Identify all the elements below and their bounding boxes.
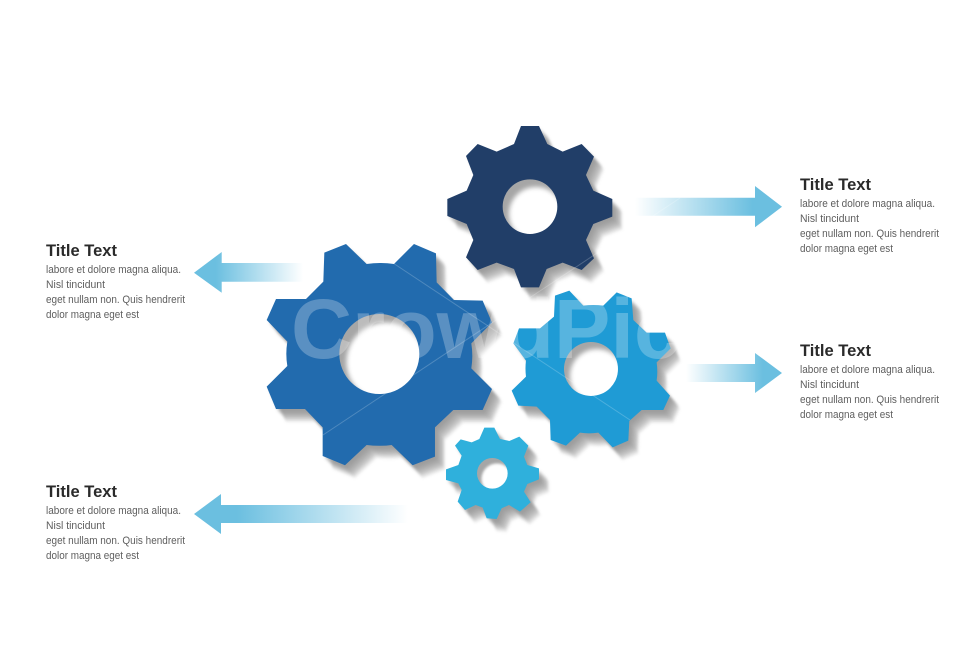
text block: lower left: labore et dolore magna aliqua. [46, 505, 181, 517]
text block: top right: Title Text [800, 175, 871, 194]
text block: lower left: dolor magna eget est [46, 550, 139, 562]
text block: lower left: eget nullam non. Quis hendrerit [46, 535, 185, 547]
text block: upper left: Nisl tincidunt [46, 279, 105, 291]
text block: middle right: dolor magna eget est [800, 409, 893, 421]
gear: dark navy [447, 126, 622, 300]
text block: upper left: eget nullam non. Quis hendrerit [46, 294, 185, 306]
text block: middle right [800, 341, 939, 421]
gear: large blue [267, 244, 502, 478]
text block: upper left: labore et dolore magna aliqua. [46, 264, 181, 276]
watermark [291, 198, 681, 435]
text block: upper left: dolor magna eget est [46, 309, 139, 321]
text block: upper left: Title Text [46, 241, 117, 260]
text block: lower left: Nisl tincidunt [46, 520, 105, 532]
text block: top right: labore et dolore magna aliqua. [800, 198, 935, 210]
text block: middle right: Nisl tincidunt [800, 379, 859, 391]
text block: middle right: labore et dolore magna aliqua. [800, 364, 935, 376]
arrow: middle right [686, 353, 782, 393]
text block: top right: dolor magna eget est [800, 243, 893, 255]
text block: top right: eget nullam non. Quis hendrerit [800, 228, 939, 240]
arrow: top right [635, 186, 782, 227]
gear: medium sky blue [512, 291, 681, 460]
arrow: upper left [194, 252, 303, 293]
gear: small cyan [446, 428, 549, 532]
text block: top right: Nisl tincidunt [800, 213, 859, 225]
text block: lower left [46, 482, 185, 562]
text block: upper left [46, 241, 185, 321]
watermark: CrowdPic [291, 282, 681, 376]
text block: top right [800, 175, 939, 255]
text block: middle right: eget nullam non. Quis hendrerit [800, 394, 939, 406]
text block: lower left: Title Text [46, 482, 117, 501]
arrow: lower left [194, 494, 408, 534]
text block: middle right: Title Text [800, 341, 871, 360]
